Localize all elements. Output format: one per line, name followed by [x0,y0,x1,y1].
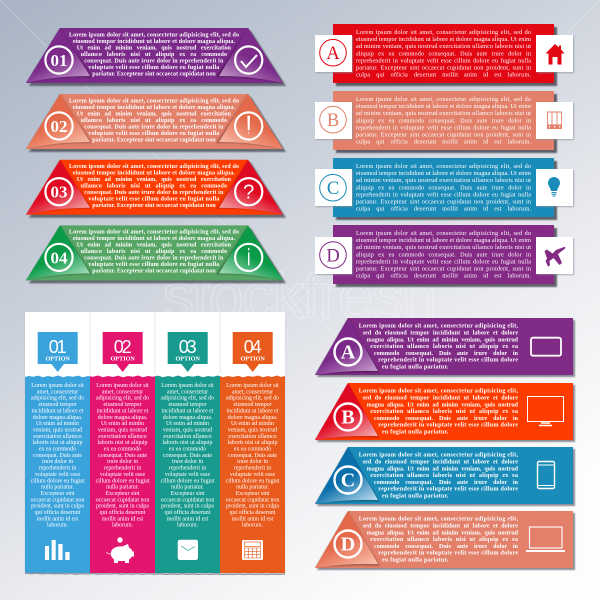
body text: aliquip ex ea commodo consequat. Duis aute irure dolor in [356,117,531,124]
panel: card D purple [315,225,574,287]
icon: binders [536,102,574,140]
body text: Ut enim ad minim veniam, quis nostrud exercitation [77,111,232,117]
body text: eiusmod tempor incididunt ut labore et dolore magna aliqua. [73,170,236,176]
column text: dolore magna aliqua. [163,415,213,421]
body text: pariatur. Excepteur sint occaecat cupidatat non proident, sunt in [356,266,531,272]
letter badge D [315,237,353,275]
panel: ribbon A purple [315,318,575,377]
panel: four option columns [25,312,285,574]
text: stockfresh [162,260,438,332]
body text: eu fugiat nulla pariatur. [382,430,449,436]
body text: Lorem ipsum dolor sit amet, consectetur adipisicing elit, sed do [69,164,239,170]
icon: landscape tablet [531,338,561,356]
column text: irure dolor in [107,459,138,465]
tag 01 [38,332,78,372]
number badge 01: 01 [50,51,68,70]
column text: incididunt ut labore et [97,408,149,414]
column text: incididunt ut labore et [32,408,84,414]
body text: reprehenderit in voluptate velit esse cillum dolore eu fugiat nulla [356,258,531,265]
letter badge B [315,102,353,140]
column text: Excepteur sint [41,491,75,497]
number badge 02 [45,112,73,140]
body text: aliquip ex ea commodo consequat. Duis aute irure dolor in [356,50,531,57]
body text: pariatur. Excepteur sint occaecat cupidatat non [92,71,216,77]
panel: banner 02 salmon [26,94,286,152]
body text: reprehenderit in voluptate velit esse cillum dolore eu fugiat nulla [356,57,531,64]
column text: exercitation ullamco [98,434,147,440]
body text: consequat. Duis aute irure dolor in reprehenderit in [84,190,224,196]
body text [359,389,519,436]
body text [359,453,519,500]
column text: Ut enim ad minim [36,421,79,427]
body text [69,98,239,143]
letter badge A [315,35,353,73]
icon: calculator [242,540,263,560]
ribbon body [315,447,573,504]
column text: exercitation ullamco [228,434,277,440]
column text: consequat. Duis aute [163,453,212,459]
column text: proident, sunt in culpa [31,504,84,510]
column text: eiusmod tempor [233,402,272,408]
column text: reprehenderit in [104,466,141,472]
body text: Lorem ipsum dolor sit amet, consectetur adipisicing elit, sed do [69,230,239,236]
body text: aliquip ex ea commodo consequat. Duis aute irure dolor in [356,184,531,191]
letter badge B [334,404,362,430]
body text: reprehenderit in voluptate velit esse cillum dolore [378,423,518,429]
column text: reprehenderit in [234,466,271,472]
column text: incididunt ut labore et [227,408,279,414]
folded corner [315,511,378,568]
column text: Ut enim ad minim [231,421,274,427]
banner body [26,94,283,149]
column text: occaecat cupidatat non [96,497,149,503]
tag 04: OPTION [240,356,265,362]
body text: ad minim veniam, quis nostrud exercitation ullamco laboris nisi ut [356,244,531,251]
letter badge C [315,169,353,207]
body text: commodo consequat. Duis aute irure dolor in [374,416,519,422]
body text: Ut enim ad minim veniam, quis nostrud exercitation [77,177,232,183]
column text: qui officia deserunt [165,509,211,516]
body text: Ut enim ad minim veniam, quis nostrud exercitation [77,243,232,249]
column text: dolore magna aliqua. [98,415,148,421]
letter badge D [334,530,362,558]
column text: ex ea commodo [169,446,206,452]
body text: pariatur. Excepteur sint occaecat cupidatat non [92,137,216,143]
column text: irure dolor in [237,459,268,465]
body text: pariatur. Excepteur sint occaecat cupidatat non [92,203,216,209]
icon: exclamation mark [235,112,262,140]
body text: ullamco laboris nisi ut aliquip ex ea commodo [81,52,227,58]
panel: banner 04 green [26,225,286,283]
column text: amet, consectetur [37,389,78,395]
column text: proident, sunt in culpa [226,504,279,510]
number badge 03: 03 [50,183,68,202]
body text: eiusmod tempor incididunt ut labore et dolore magna aliqua. Ut enim [356,103,531,110]
column text: Lorem ipsum dolor sit [96,383,149,389]
column text: voluptate velit esse [100,472,145,478]
body text: Lorem ipsum dolor sit amet, consectetur adipisicing elit, [359,453,518,459]
body text [356,96,531,146]
body text: eiusmod tempor incididunt ut labore et dolore magna aliqua. [73,105,236,111]
body text: sed do eiusmod tempor incididunt ut labore et dolore [363,396,518,402]
column text: consequat. Duis aute [33,453,82,459]
column text: laborum. [47,523,69,529]
letter badge A: A [341,342,356,364]
panel: ribbon B red-orange [315,383,575,442]
body text [356,230,531,280]
column 1 fill [25,375,90,573]
folded corner [315,383,378,440]
column text: laboris nisi ut aliquip [163,440,213,446]
icon: piggy bank [106,537,134,563]
body text: Lorem ipsum dolor sit amet, consectetur adipisicing elit, sed do [69,32,239,38]
icon: smartphone [538,462,554,488]
icon: airplane [536,237,574,275]
body text: voluptate velit esse cillum dolore eu fugiat nulla [88,262,219,268]
column text: occaecat cupidatat non [226,497,279,503]
panel: ribbon D salmon [315,511,575,570]
body text: Lorem ipsum dolor sit amet, consectetur adipisicing elit, sed do [356,163,531,170]
column text: mollit anim id est [37,516,79,522]
column text: nulla pariatur. [171,485,204,491]
body text: ullamco laboris nisi ut aliquip ex ea commodo [81,183,227,189]
body text: magna aliqua. Ut enim ad minim veniam, quis nostrud [367,530,519,536]
body text: pariatur. Excepteur sint occaecat cupidatat non proident, sunt in [356,132,531,138]
panel: ribbon C blue [315,447,575,506]
column text: cillum dolore eu fugiat [96,477,150,484]
column text: exercitation ullamco [163,434,212,440]
body text: Lorem ipsum dolor sit amet, consectetur adipisicing elit, sed do [356,230,531,237]
column text: amet, consectetur [167,389,208,395]
column text: Ut enim ad minim [101,421,144,427]
column text: veniam, quis nostrud [98,427,147,433]
letter badge A [334,338,362,366]
column text: reprehenderit in [39,466,76,472]
torn bottom edge [25,573,285,574]
column text: reprehenderit in [169,466,206,472]
column text: eiusmod tempor [168,402,207,408]
body text: voluptate velit esse cillum dolore eu fugiat nulla [88,65,219,71]
folded corner [315,447,378,504]
column text: nulla pariatur. [236,485,269,491]
body text: consequat. Duis aute irure dolor in reprehenderit in [84,256,224,262]
body text: pariatur. Excepteur sint occaecat cupidatat non proident, sunt in [356,64,531,72]
body text [69,230,239,275]
number badge 02: 02 [50,117,68,136]
column text: mollit anim id est [232,516,274,522]
column text: ex ea commodo [234,446,271,452]
icon: question mark: ? [243,182,254,204]
column text: qui officia deserunt [230,509,276,516]
body text: ullamco laboris nisi ut aliquip ex ea commodo [81,249,227,255]
tag 04: 04 [244,337,262,357]
body text: magna aliqua. Ut enim ad minim veniam, quis nostrud [367,402,519,408]
torn white header [25,312,285,377]
column text: laboris nisi ut aliquip [228,440,278,446]
body text: voluptate velit esse cillum dolore eu fugiat nulla [88,196,219,202]
body text [359,324,519,370]
body text [359,517,519,564]
body text: exercitation ullamco laboris nisi ut aliquip ex ea [370,473,518,479]
column text: laboris nisi ut aliquip [33,440,83,446]
body text: culpa qui officia deserunt mollit anim id est laborum. [356,273,531,280]
body text: reprehenderit in voluptate velit esse cillum dolore [378,551,518,557]
column text: voluptate velit esse [35,472,80,478]
body text: Lorem ipsum dolor sit amet, consectetur adipisicing elit, sed do [356,29,531,36]
icon: bar chart [45,540,70,560]
column text: adipisicing elit, sed do [31,396,84,402]
column text: qui officia deserunt [100,509,146,516]
body text: Lorem ipsum dolor sit amet, consectetur adipisicing elit, [359,517,518,523]
panel: card C blue [315,158,574,220]
banner body [26,225,283,280]
tag 04 [233,332,273,372]
column text: mollit anim id est [102,516,144,522]
column text: irure dolor in [172,459,203,465]
column text: adipisicing elit, sed do [226,396,279,402]
number badge 03 [45,178,73,205]
body text: reprehenderit in voluptate velit esse cillum dolore [378,487,518,493]
body text: reprehenderit in voluptate velit esse cillum dolore eu fugiat nulla [356,191,531,198]
letter badge C: C [341,470,355,492]
option column 4 [226,332,280,560]
body text: voluptate velit esse cillum dolore eu fugiat nulla [88,131,219,137]
column text: amet, consectetur [232,389,273,395]
body text: commodo consequat. Duis aute irure dolor in [374,544,519,550]
body text: ad minim veniam, quis nostrud exercitation ullamco laboris nisi ut [356,43,531,50]
option column 1 [31,332,85,560]
body text: eu fugiat nulla pariatur. [382,494,449,500]
body text: Lorem ipsum dolor sit amet, consectetur adipisicing elit, [359,324,518,330]
tag 01: OPTION [45,356,70,362]
column text: consequat. Duis aute [98,453,147,459]
body text: reprehenderit in voluptate velit esse cillum dolore [378,358,518,364]
column text: Excepteur sint [171,491,205,497]
body text: consequat. Duis aute irure dolor in reprehenderit in [84,58,224,64]
panel: card A red [315,24,574,86]
column text: occaecat cupidatat non [31,497,84,503]
column text: consequat. Duis aute [228,453,277,459]
column text: incididunt ut labore et [162,408,214,414]
column text [226,383,280,529]
body text [69,164,239,209]
column text: dolore magna aliqua. [228,415,278,421]
body text: Ut enim ad minim veniam, quis nostrud exercitation [77,45,232,51]
ribbon body [315,318,573,375]
column text: Lorem ipsum dolor sit [161,383,214,389]
body text: Lorem ipsum dolor sit amet, consectetur adipisicing elit, sed do [69,98,239,104]
column text: laboris nisi ut aliquip [98,440,148,446]
body text: eiusmod tempor incididunt ut labore et dolore magna aliqua. Ut enim [356,237,531,244]
column text: Excepteur sint [106,491,140,497]
column text: laborum. [177,523,199,529]
body text: ad minim veniam, quis nostrud exercitation ullamco laboris nisi ut [356,177,531,184]
banner body [26,28,283,83]
number badge 04: 04 [50,248,68,267]
column text: irure dolor in [42,459,73,465]
ribbon body [315,383,573,440]
body text: pariatur. Excepteur sint occaecat cupidatat non proident, sunt in [356,198,531,206]
icon: question mark [235,178,262,205]
body text: exercitation ullamco laboris nisi ut aliquip ex ea [370,537,518,543]
card body [333,24,554,83]
letter badge A: A [326,44,340,64]
card body [333,91,554,150]
body text [69,32,239,77]
column text: Lorem ipsum dolor sit [31,383,84,389]
banner body [26,160,283,215]
column text: dolore magna aliqua. [33,415,83,421]
body text: magna aliqua. Ut enim ad minim veniam, quis nostrud [367,466,519,472]
body text: exercitation ullamco laboris nisi ut aliquip ex ea [370,344,518,350]
column text: Lorem ipsum dolor sit [226,383,279,389]
body text: aliquip ex ea commodo consequat. Duis aute irure dolor in [356,251,531,258]
tag 02 [103,332,143,372]
body text: sed do eiusmod tempor incididunt ut labore et dolore [363,330,518,336]
column text: cillum dolore eu fugiat [161,477,215,484]
body text: commodo consequat. Duis aute irure dolor in [374,351,519,357]
body text: eu fugiat nulla pariatur. [382,558,449,564]
icon: house [536,35,574,73]
column text: ex ea commodo [104,446,141,452]
body text: magna aliqua. Ut enim ad minim veniam, quis nostrud [367,337,519,343]
tag 01: 01 [49,337,67,357]
column 4 fill [220,375,285,573]
column text: veniam, quis nostrud [228,427,277,433]
card body [333,158,554,217]
column text: occaecat cupidatat non [161,497,214,503]
body text: commodo consequat. Duis aute irure dolor in [374,480,519,486]
column text: veniam, quis nostrud [33,427,82,433]
column text: exercitation ullamco [33,434,82,440]
column text: eiusmod tempor [103,402,142,408]
number badge 01 [45,46,73,74]
body text: ad minim veniam, quis nostrud exercitation ullamco laboris nisi ut [356,110,531,117]
column text: voluptate velit esse [230,472,275,478]
letter badge D: D [326,246,340,266]
body text: eiusmod tempor incididunt ut labore et dolore magna aliqua. [73,236,236,242]
column text: nulla pariatur. [41,485,74,491]
letter badge D: D [341,534,355,556]
body text: Lorem ipsum dolor sit amet, consectetur adipisicing elit, [359,389,518,395]
body text [356,29,531,79]
body text: eiusmod tempor incididunt ut labore et dolore magna aliqua. Ut enim [356,36,531,43]
column text: veniam, quis nostrud [163,427,212,433]
body text: culpa qui officia deserunt mollit anim id est laborum. [356,72,531,79]
body text: exercitation ullamco laboris nisi ut aliquip ex ea [370,409,518,415]
icon: laptop [526,527,565,551]
column text: adipisicing elit, sed do [96,396,149,402]
column text: cillum dolore eu fugiat [226,477,280,484]
body text: pariatur. Excepteur sint occaecat cupidatat non [92,269,216,275]
body text: eu fugiat nulla pariatur. [382,364,449,370]
option column 3 [161,332,215,560]
body text: reprehenderit in voluptate velit esse cillum dolore eu fugiat nulla [356,124,531,131]
tag 03 [168,332,208,372]
icon: info [235,244,262,271]
body text: eiusmod tempor incididunt ut labore et dolore magna aliqua. [73,39,236,45]
tag 03: OPTION [175,356,200,362]
body text: consequat. Duis aute irure dolor in reprehenderit in [84,124,224,130]
panel: card B salmon [315,91,574,153]
column text: qui officia deserunt [35,509,81,516]
letter badge B: B [341,406,355,428]
tag 02: OPTION [110,356,135,362]
column text [96,383,150,529]
column text: nulla pariatur. [106,485,139,491]
body text: sed do eiusmod tempor incididunt ut labore et dolore [363,524,518,530]
column text: amet, consectetur [102,389,143,395]
column text: laborum. [112,523,134,529]
letter badge C [334,466,362,494]
column 3 fill [155,375,220,573]
letter badge B: B [327,111,339,131]
body text: culpa qui officia deserunt mollit anim id est laborum. [356,139,531,146]
body text: eiusmod tempor incididunt ut labore et dolore magna aliqua. Ut enim [356,170,531,177]
column text: Excepteur sint [236,491,270,497]
column 2 fill [90,375,155,573]
card body [333,225,554,284]
column text: ex ea commodo [39,446,76,452]
body text: Lorem ipsum dolor sit amet, consectetur adipisicing elit, sed do [356,96,531,103]
column text: proident, sunt in culpa [96,504,149,510]
icon: envelope [178,540,198,560]
body text: sed do eiusmod tempor incididunt ut labore et dolore [363,460,518,466]
folded corner [315,318,378,375]
panel: banner 01 purple [26,28,286,86]
icon: monitor [528,396,564,426]
body text: culpa qui officia deserunt mollit anim id est laborum. [356,206,531,213]
panel: banner 03 red [26,160,286,218]
tag 02: 02 [114,337,132,357]
option column 2 [96,332,150,563]
column text: eiusmod tempor [38,402,77,408]
column text: voluptate velit esse [165,472,210,478]
body text [356,163,531,213]
tag 03: 03 [179,337,197,357]
ribbon body [315,511,573,568]
column text: cillum dolore eu fugiat [31,477,85,484]
column text: adipisicing elit, sed do [161,396,214,402]
body text: ullamco laboris nisi ut aliquip ex ea commodo [81,118,227,124]
column text: mollit anim id est [167,516,209,522]
column text: laborum. [242,523,264,529]
icon: light bulb [536,169,574,207]
letter badge C: C [327,179,339,199]
number badge 04 [45,244,73,271]
icon: check mark [235,46,262,74]
column text: proident, sunt in culpa [161,504,214,510]
column text: Ut enim ad minim [166,421,209,427]
column text [161,383,215,529]
column text [31,383,85,529]
